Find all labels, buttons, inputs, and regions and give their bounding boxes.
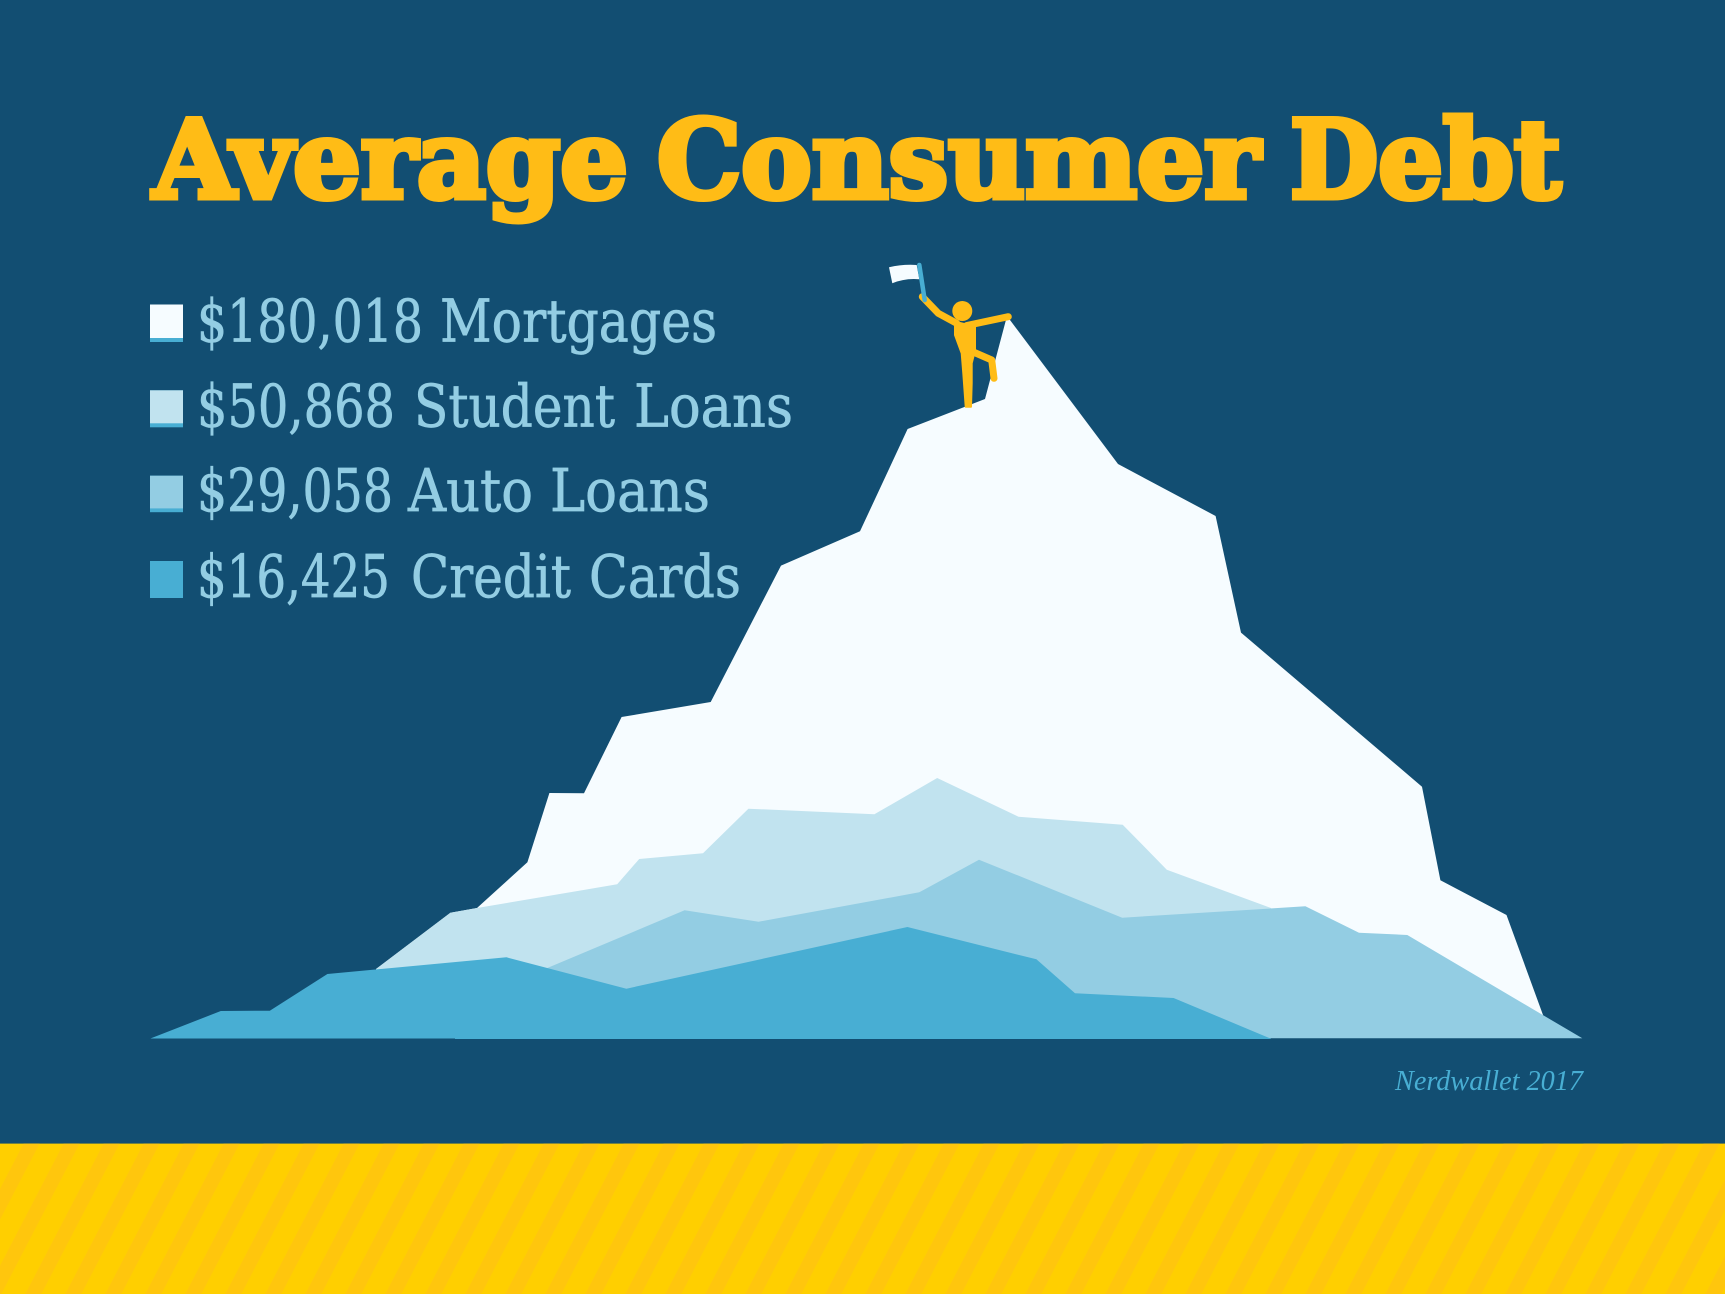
title: Average	[152, 98, 628, 224]
legend	[150, 286, 793, 611]
mountain layer: mortgages	[376, 316, 1543, 1038]
source credit: Nerdwallet 2017	[1394, 1065, 1584, 1097]
climber with flag	[889, 265, 1008, 407]
legend item: student loans: Student	[414, 372, 615, 440]
legend item: auto loans	[150, 456, 710, 525]
legend item: auto loans: Loans	[550, 456, 710, 525]
mountain layer: student loans	[376, 778, 1300, 1038]
legend item: credit cards	[150, 542, 741, 611]
legend item: credit cards: Credit	[411, 542, 571, 611]
legend item: mortgages: $180,018	[197, 286, 423, 355]
flag	[889, 265, 919, 283]
legend item: auto loans: $29,058	[197, 456, 393, 525]
legend item: student loans: $50,868	[197, 372, 395, 440]
climber figure	[922, 297, 1008, 407]
title: Consumer	[657, 98, 1262, 224]
legend item: student loans: Loans	[634, 372, 793, 440]
legend item: mortgages	[150, 286, 717, 355]
striped footer band	[0, 1144, 1725, 1294]
mountain layer: auto loans	[455, 860, 1582, 1038]
flag pole	[919, 265, 925, 300]
legend item: mortgages: Mortgages	[440, 286, 717, 355]
title	[152, 98, 1561, 224]
legend item: credit cards: $16,425	[197, 542, 390, 611]
mountain layer: credit cards	[150, 927, 1271, 1039]
mountain chart	[150, 316, 1582, 1039]
legend item: credit cards: Cards	[589, 542, 741, 611]
title: Debt	[1290, 98, 1561, 224]
legend item: student loans	[150, 372, 793, 440]
legend item: auto loans: Auto	[407, 456, 533, 525]
